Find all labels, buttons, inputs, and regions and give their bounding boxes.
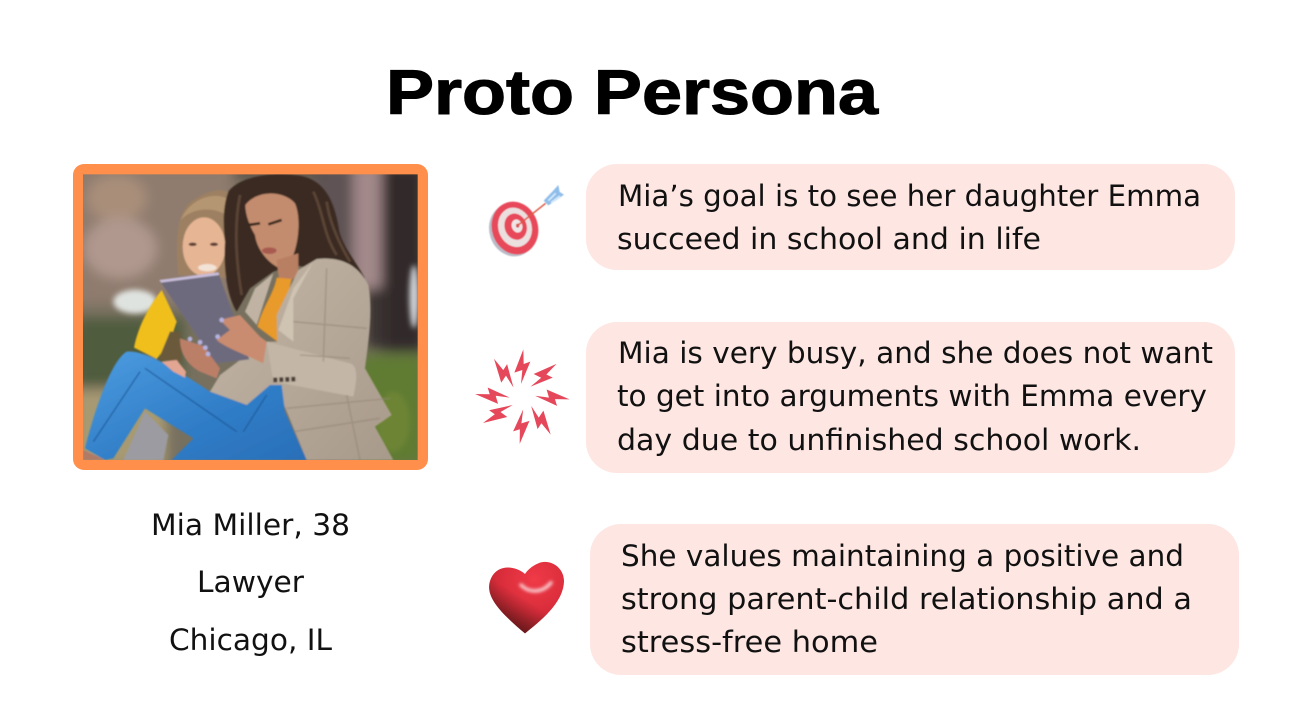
photo frame bbox=[73, 164, 428, 470]
name and age: Mia Miller, 38 bbox=[151, 508, 350, 542]
goal text: Mia’s goal is to see her daughter Emma bbox=[618, 179, 1201, 213]
jacket bbox=[210, 258, 393, 460]
frustrations text bbox=[617, 336, 1213, 457]
goal text bbox=[617, 179, 1201, 256]
persona details bbox=[151, 508, 350, 657]
title: Proto Persona bbox=[386, 58, 879, 128]
values text bbox=[621, 539, 1192, 659]
panel: values bbox=[590, 524, 1239, 675]
hands bbox=[217, 315, 267, 363]
grey leg bbox=[123, 412, 168, 460]
icon: lightning burst bbox=[475, 349, 570, 444]
photo: mother and daughter with tablet bbox=[73, 165, 425, 467]
panel: frustrations bbox=[586, 322, 1235, 473]
face bbox=[245, 194, 299, 268]
jeans bbox=[85, 352, 307, 460]
icon: target with arrow bbox=[482, 185, 564, 263]
location: Chicago, IL bbox=[169, 623, 332, 657]
girl bbox=[177, 190, 233, 278]
values text: stress-free home bbox=[621, 625, 878, 659]
frustrations text: to get into arguments with Emma every bbox=[617, 379, 1207, 413]
panel: goal bbox=[586, 164, 1235, 270]
goal text: succeed in school and in life bbox=[617, 222, 1041, 256]
values text: strong parent-child relationship and a bbox=[621, 582, 1192, 616]
tablet bbox=[159, 272, 249, 364]
frustrations text: day due to unfinished school work. bbox=[617, 423, 1141, 457]
woman hair bbox=[224, 174, 365, 312]
icon: 3D heart bbox=[489, 562, 564, 633]
occupation: Lawyer bbox=[197, 565, 304, 599]
orange top bbox=[257, 278, 292, 342]
values text: She values maintaining a positive and bbox=[621, 539, 1184, 573]
panel: persona photo bbox=[73, 164, 428, 470]
frustrations text: Mia is very busy, and she does not want bbox=[618, 336, 1213, 370]
